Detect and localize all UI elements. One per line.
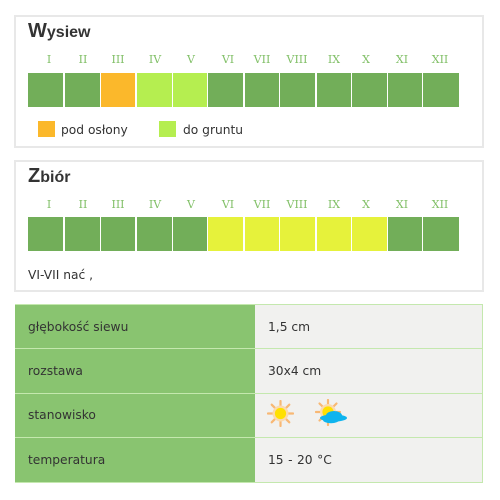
month labels: I [47, 53, 51, 66]
month labels: XII [432, 53, 448, 66]
month labels: VI [222, 53, 234, 66]
month labels: III [111, 198, 125, 211]
month labels: X [362, 198, 370, 211]
legend: pod osłony: pod osłony [61, 123, 128, 137]
month labels: IX [328, 198, 340, 211]
table: growing parameters [15, 304, 483, 483]
month labels: XI [396, 53, 408, 66]
row: stanowisko [15, 394, 482, 437]
month labels: X [362, 53, 370, 66]
month labels: IV [149, 53, 161, 66]
row: rozstawa [15, 349, 482, 393]
row: stanowisko: stanowisko [28, 408, 96, 422]
row: głębokość siewu [15, 305, 482, 348]
month labels: XII [432, 198, 448, 211]
row: rozstawa: rozstawa [28, 364, 83, 378]
row: głębokość siewu: głębokość siewu [28, 320, 128, 334]
row: temperatura [15, 438, 482, 482]
legend: do gruntu: do gruntu [183, 123, 243, 137]
month labels: V [187, 198, 195, 211]
row: rozstawa: 30x4 cm [268, 364, 321, 378]
panel: Wysiew [14, 15, 484, 148]
month labels: VIII [286, 53, 307, 66]
month labels: IV [149, 198, 161, 211]
month labels [47, 53, 448, 66]
heading: Zbiór: Zbiór [28, 165, 70, 187]
calendar bar: sowing months [28, 73, 459, 107]
icon: sun behind cloud [315, 399, 347, 426]
month labels: III [111, 53, 125, 66]
icon: sun [267, 400, 294, 427]
month labels: XI [396, 198, 408, 211]
calendar bar: harvest months [28, 217, 459, 251]
month labels: VII [254, 198, 270, 211]
month labels: II [79, 53, 87, 66]
month labels: VII [254, 53, 270, 66]
month labels: V [187, 53, 195, 66]
legend: pod osłony [38, 121, 128, 137]
month labels [47, 198, 448, 211]
row: głębokość siewu: 1,5 cm [268, 320, 310, 334]
month labels: I [47, 198, 51, 211]
month labels: II [79, 198, 87, 211]
row: temperatura: 15 - 20 °C [268, 453, 332, 467]
month labels: IX [328, 53, 340, 66]
month labels: VIII [286, 198, 307, 211]
heading: Wysiew: Wysiew [28, 20, 90, 42]
month labels: VI [222, 198, 234, 211]
legend: do gruntu [159, 121, 243, 137]
harvest note: VI-VII nać , [28, 268, 93, 282]
panel: Zbiór [14, 160, 484, 292]
row: temperatura: temperatura [28, 453, 105, 467]
